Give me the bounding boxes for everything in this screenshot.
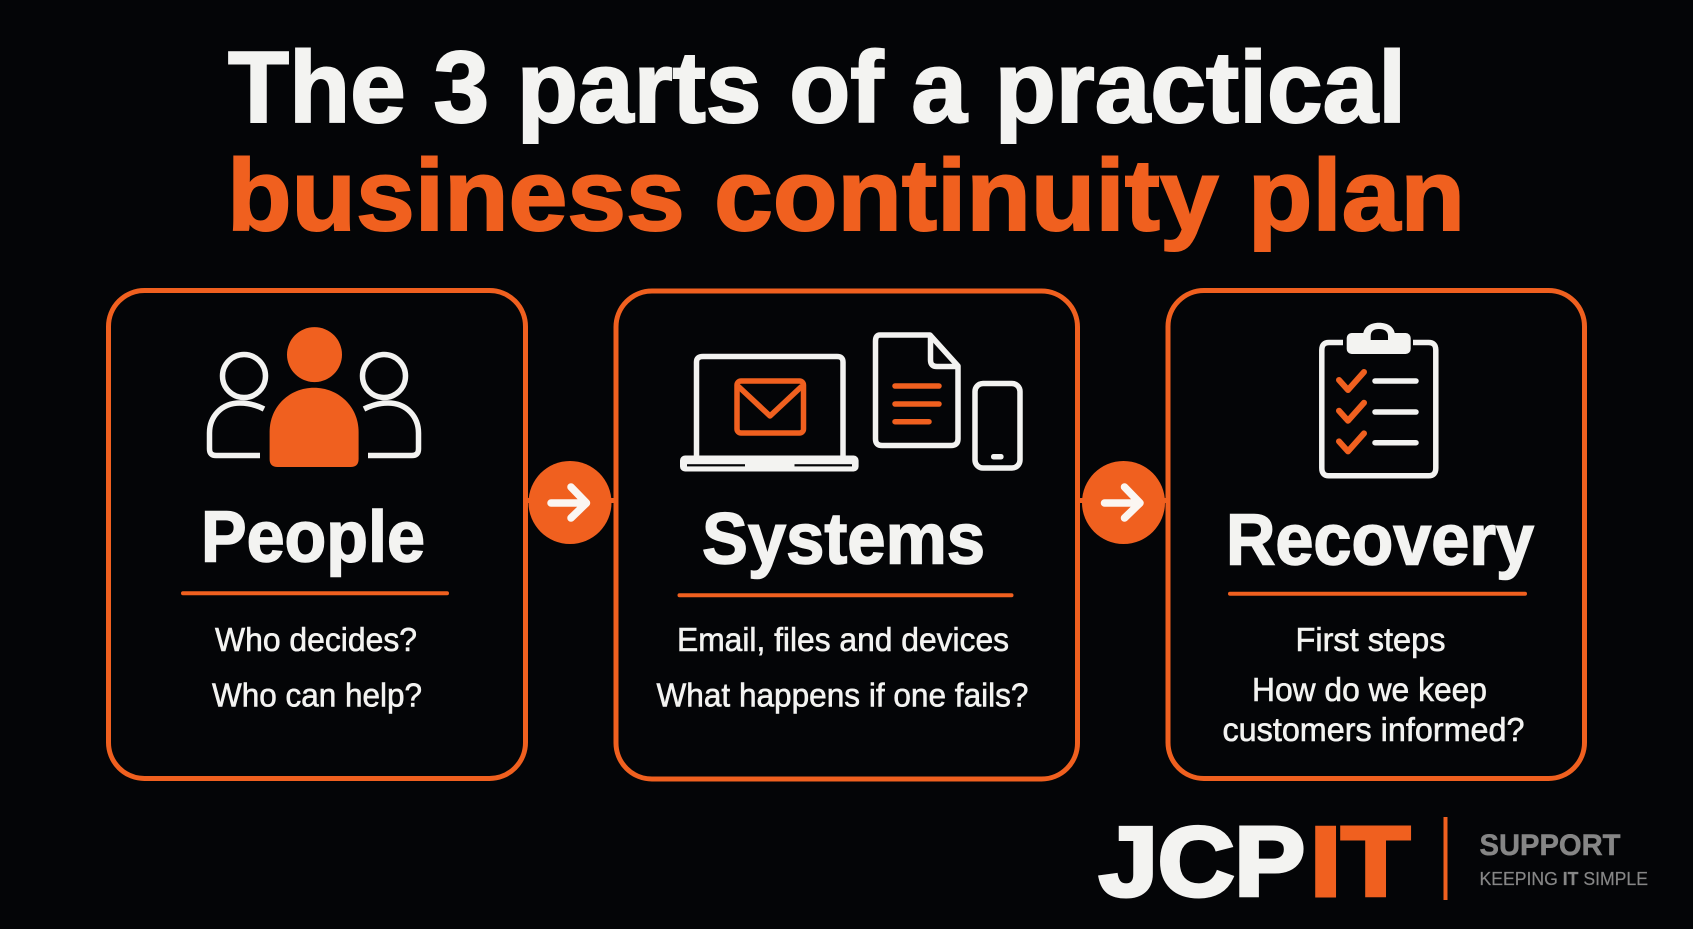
logo divider: [1444, 817, 1448, 900]
connector stubs: [525, 498, 1168, 503]
tagline: KEEPING IT SIMPLE: [1480, 869, 1648, 889]
icon: clipboard: [1322, 323, 1436, 476]
text: systems questions: What happens if one fails?: [656, 677, 1028, 714]
tagline: [1480, 829, 1648, 889]
text: recovery questions: [1222, 621, 1524, 748]
arrow: people to systems: [528, 461, 612, 544]
heading: Systems: Systems: [702, 500, 985, 580]
heading: Recovery: Recovery: [1226, 500, 1534, 580]
wordmark: IT: [1310, 806, 1410, 916]
panel: recovery: [1168, 290, 1584, 778]
text: people questions: [212, 621, 422, 714]
panel: systems: [616, 291, 1078, 779]
checklist marks: [1339, 372, 1416, 451]
icon: devices: [680, 335, 1020, 472]
wordmark: [1099, 806, 1410, 916]
text: recovery questions: customers informed?: [1222, 711, 1524, 748]
heading rule: [1228, 592, 1527, 596]
text: people questions: Who decides?: [215, 621, 417, 658]
panel: people: [108, 290, 526, 778]
heading rule: [678, 593, 1014, 597]
arrow: systems to recovery: [1082, 461, 1165, 544]
icon: document: [876, 335, 958, 446]
icon: phone: [975, 384, 1020, 468]
icon: people: [210, 327, 418, 467]
wordmark: JCP: [1099, 806, 1305, 916]
text: systems questions: Email, files and devices: [677, 621, 1009, 658]
heading: People: People: [201, 498, 425, 578]
heading rule: [181, 591, 449, 595]
text: systems questions: [656, 621, 1028, 714]
title: The 3 parts of a practical: [228, 30, 1406, 144]
text: people questions: Who can help?: [212, 677, 422, 714]
text: recovery questions: First steps: [1296, 621, 1446, 658]
text: recovery questions: How do we keep: [1252, 671, 1487, 708]
logo: [1099, 806, 1648, 916]
icon: laptop: [680, 356, 859, 472]
tagline: SUPPORT: [1480, 829, 1620, 862]
title: business continuity plan: [227, 138, 1465, 252]
title: [227, 30, 1465, 252]
